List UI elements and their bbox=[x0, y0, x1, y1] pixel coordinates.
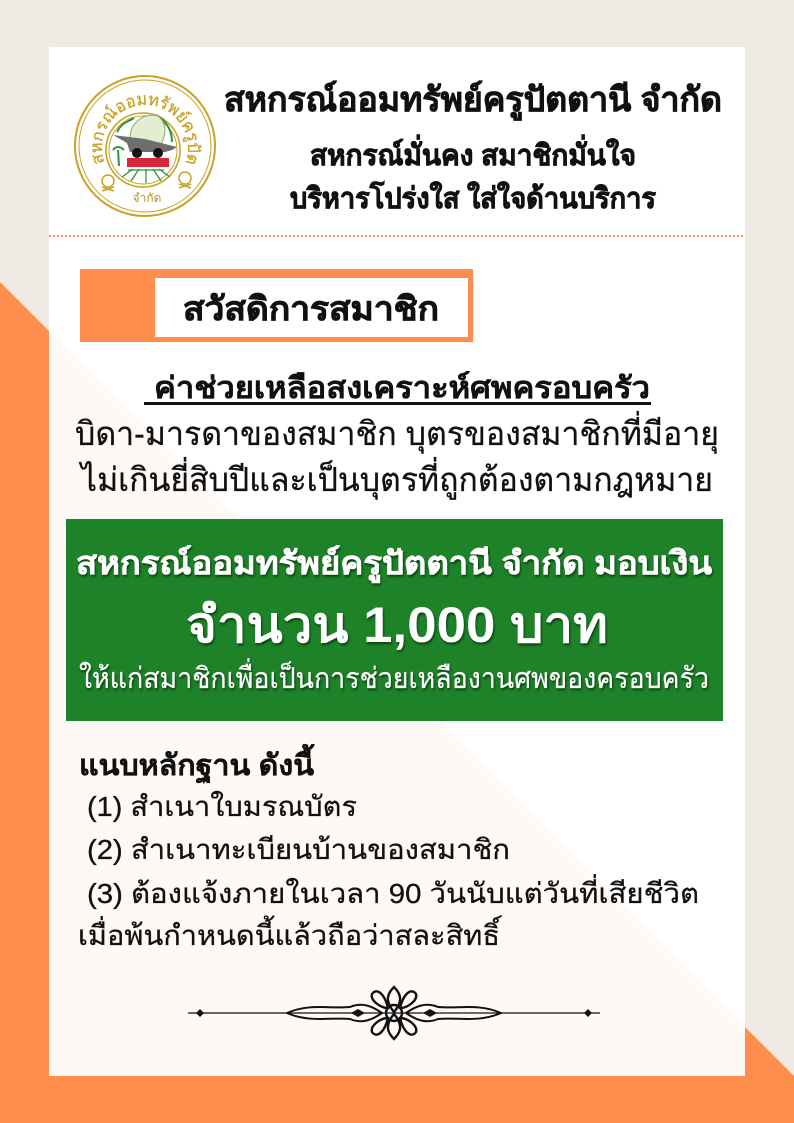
logo: cooperative seal: จำกัด bbox=[133, 191, 161, 205]
text block: required documents bbox=[78, 743, 699, 951]
panel: green award banner bbox=[66, 519, 723, 721]
text block: required documents: (1) สำเนาใบมรณบัตร bbox=[87, 790, 357, 822]
text block: required documents: (3) ต้องแจ้งภายในเวลา 90 วันนับแต่วันที่เสียชีวิต bbox=[87, 874, 699, 909]
text block: family funeral assistance bbox=[75, 371, 719, 500]
text block: required documents: (2) สำเนาทะเบียนบ้านของสมาชิก bbox=[87, 834, 510, 865]
text block: required documents: แนบหลักฐาน ดังนี้ bbox=[79, 743, 315, 784]
title: cooperative name and motto: บริหารโปร่งใส ใส่ใจด้านบริการ bbox=[290, 180, 656, 215]
ornament: floral divider bbox=[188, 987, 600, 1039]
logo: cooperative seal bbox=[74, 75, 216, 217]
panel: green award banner: จำนวน 1,000 บาท bbox=[186, 597, 608, 653]
heading: member welfare: สวัสดิการสมาชิก bbox=[183, 290, 439, 327]
text block: family funeral assistance: ไม่เกินยี่สิบปีและเป็นบุตรที่ถูกต้องตามกฎหมาย bbox=[78, 457, 713, 500]
title: cooperative name and motto bbox=[224, 80, 722, 215]
title: cooperative name and motto: สหกรณ์มั่นคง สมาชิกมั่นใจ bbox=[310, 134, 636, 172]
text block: family funeral assistance: ค่าช่วยเหลือสงเคราะห์ศพครอบครัว bbox=[154, 371, 650, 405]
text block: family funeral assistance: บิดา-มารดาของสมาชิก บุตรของสมาชิกที่มีอายุ bbox=[75, 411, 719, 454]
panel: green award banner: ให้แก่สมาชิกเพื่อเป็นการช่วยเหลืองานศพของครอบครัว bbox=[79, 658, 709, 695]
panel: green award banner: สหกรณ์ออมทรัพย์ครูปัตตานี จำกัด มอบเงิน bbox=[76, 545, 712, 584]
title: cooperative name and motto: สหกรณ์ออมทรัพย์ครูปัตตานี จำกัด bbox=[224, 80, 722, 121]
text block: required documents: เมื่อพ้นกำหนดนี้แล้วถือว่าสละสิทธิ์ bbox=[78, 915, 503, 951]
heading: member welfare bbox=[80, 269, 473, 342]
